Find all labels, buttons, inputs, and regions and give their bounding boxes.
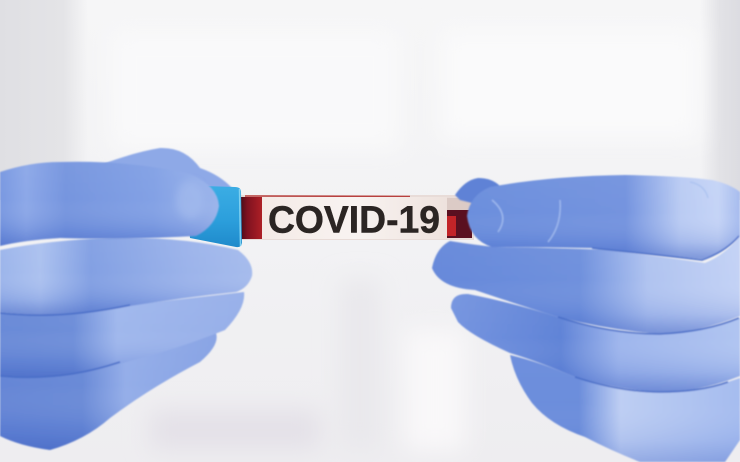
left hand: index finger shape [0, 162, 219, 246]
left glove: index finger [0, 162, 219, 246]
left hand: fingertip texture [176, 181, 204, 219]
blood right of label [447, 198, 472, 238]
cap rim [240, 189, 241, 246]
left hand: finger behind cap [100, 148, 232, 200]
tube glass [236, 195, 474, 240]
left glove: lower fingers [0, 148, 252, 450]
left hand: ring finger [0, 292, 244, 378]
tube label [262, 197, 447, 242]
tube cap [186, 186, 242, 247]
blood left of label [237, 197, 263, 239]
blood line along top of tube [245, 195, 410, 198]
left hand: finger creases [0, 305, 130, 377]
left hand: index finger shading [0, 162, 219, 246]
right glove [432, 175, 740, 462]
right hand: thumb wrinkles [492, 182, 708, 242]
left hand: middle finger [0, 238, 252, 315]
label text: COVID-19 [268, 200, 440, 242]
right hand: finger creases [558, 236, 739, 392]
left hand: little finger [0, 333, 217, 450]
right hand: thumb [467, 175, 740, 259]
right hand: middle finger [432, 236, 740, 334]
right hand: finger behind tube [455, 178, 500, 205]
test tube [236, 195, 474, 242]
right hand: little finger [510, 355, 740, 462]
right hand: ring finger [451, 294, 740, 392]
